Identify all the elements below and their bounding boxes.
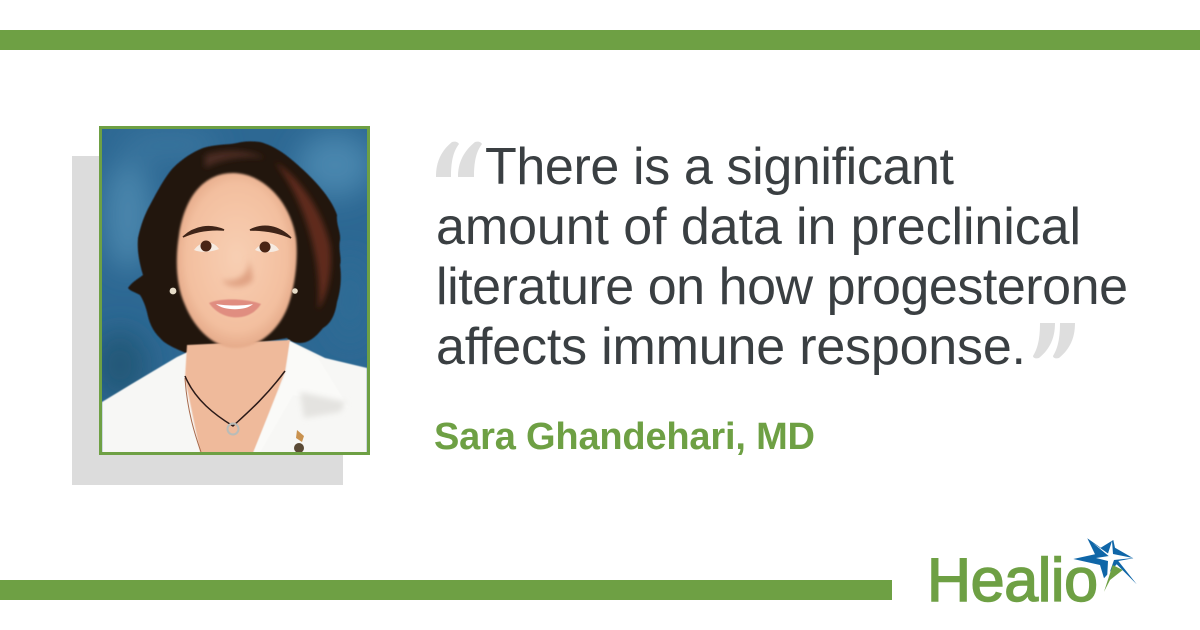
nose shade <box>222 258 253 287</box>
opening quote mark <box>436 142 482 177</box>
earrings <box>170 288 176 294</box>
logo wordmark: Healio <box>927 546 1098 614</box>
pin <box>296 430 304 442</box>
quote text: literature on how progesterone <box>436 258 1128 316</box>
mouth <box>209 299 261 317</box>
eyes <box>194 242 279 252</box>
quote text: amount of data in preclinical <box>436 198 1081 256</box>
attribution name: Sara Ghandehari, MD <box>434 416 815 458</box>
necklace <box>185 371 285 426</box>
neck and chest <box>185 340 290 456</box>
face <box>177 173 297 348</box>
green photo frame <box>100 128 368 454</box>
gray offset panel behind photo <box>72 156 343 485</box>
Healio logo <box>927 538 1137 614</box>
hair <box>128 141 341 355</box>
bottom green bar <box>0 580 892 600</box>
logo star <box>1073 538 1137 592</box>
quote text <box>436 138 1128 376</box>
portrait photo <box>92 128 373 456</box>
eyebrows <box>183 226 291 238</box>
top green bar <box>0 30 1200 50</box>
quote text: There is a significant <box>485 138 955 196</box>
closing quote mark <box>1033 323 1075 358</box>
quote text: affects immune response. <box>436 318 1026 376</box>
coat <box>102 340 367 456</box>
